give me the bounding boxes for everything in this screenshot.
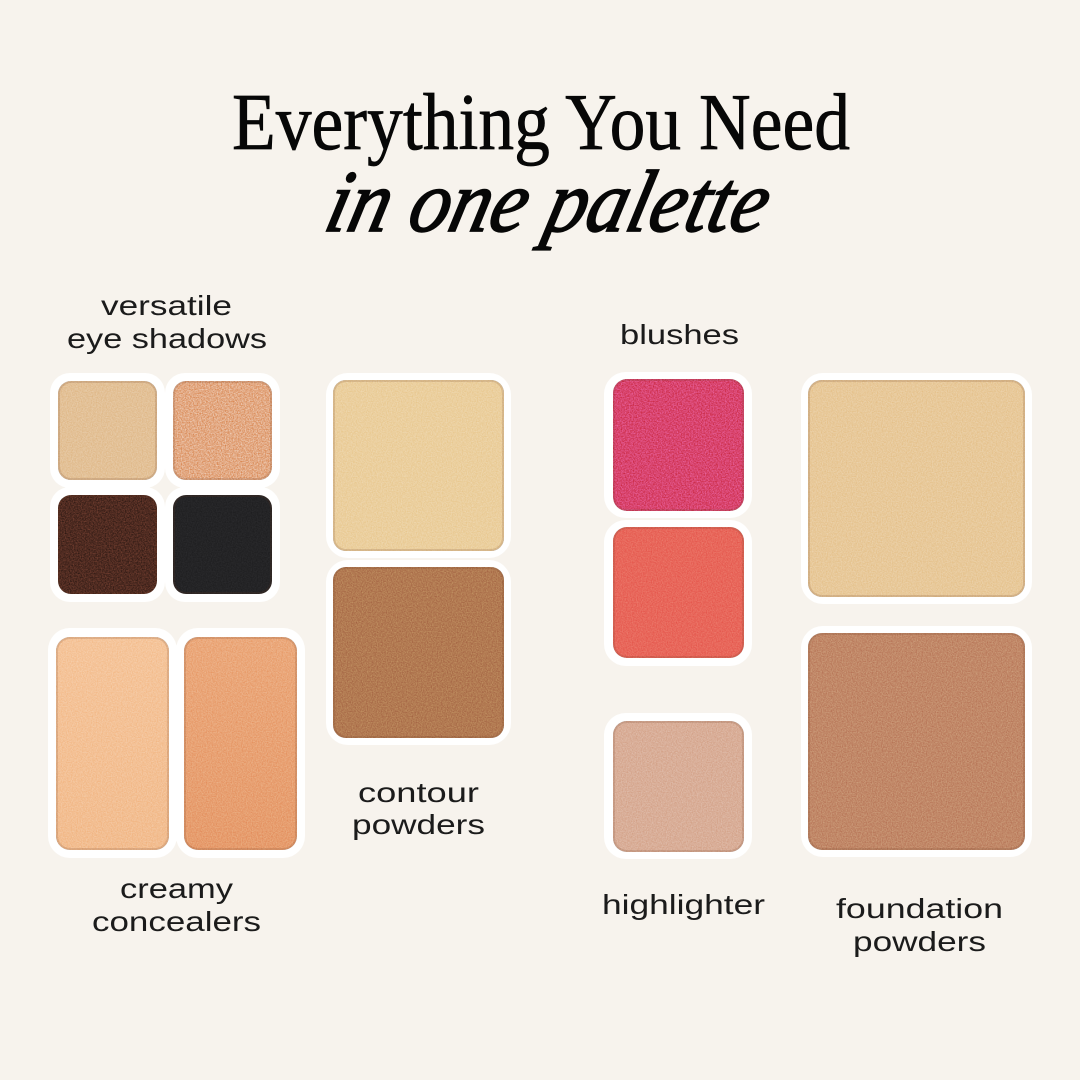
swatch: dark contour [326,560,511,745]
title line: Everything You Need: Everything You Need [232,79,850,167]
panel: eye shadows [50,290,280,602]
swatch: pink blush [604,372,752,518]
label: foundation powders [836,893,1003,957]
label: creamy concealers [92,873,261,937]
swatch: dark foundation [801,626,1032,857]
label: foundation powders: powders [853,926,986,957]
label: versatile eye shadows: eye shadows [67,323,267,354]
label: contour powders: contour [358,777,479,808]
label: contour powders [352,777,485,840]
panel: highlighter [602,713,765,920]
swatch: black [165,487,280,602]
script subtitle: in one palette: in one palette [317,153,781,251]
label: versatile eye shadows: versatile [101,290,232,321]
panel: contour powders [326,373,511,840]
swatch: medium concealer [176,628,305,858]
swatch: beige matte [50,373,165,488]
label: creamy concealers: concealers [92,906,261,937]
panel: blushes [604,319,752,666]
swatch: light foundation [801,373,1032,604]
swatch: peach shimmer [165,373,280,488]
swatch: coral blush [604,520,752,666]
panel: foundation powders [801,373,1032,957]
label: creamy concealers: creamy [120,873,233,904]
title [232,79,850,251]
label: blushes: blushes [620,319,739,350]
panel: creamy concealers [48,628,305,937]
swatch: light contour [326,373,511,558]
label: foundation powders: foundation [836,893,1003,924]
swatch: highlighter [604,713,752,859]
swatch: dark brown shimmer [50,487,165,602]
label: contour powders: powders [352,809,485,840]
label: highlighter: highlighter [602,889,765,920]
label: versatile eye shadows [67,290,267,354]
swatch: light concealer [48,628,177,858]
